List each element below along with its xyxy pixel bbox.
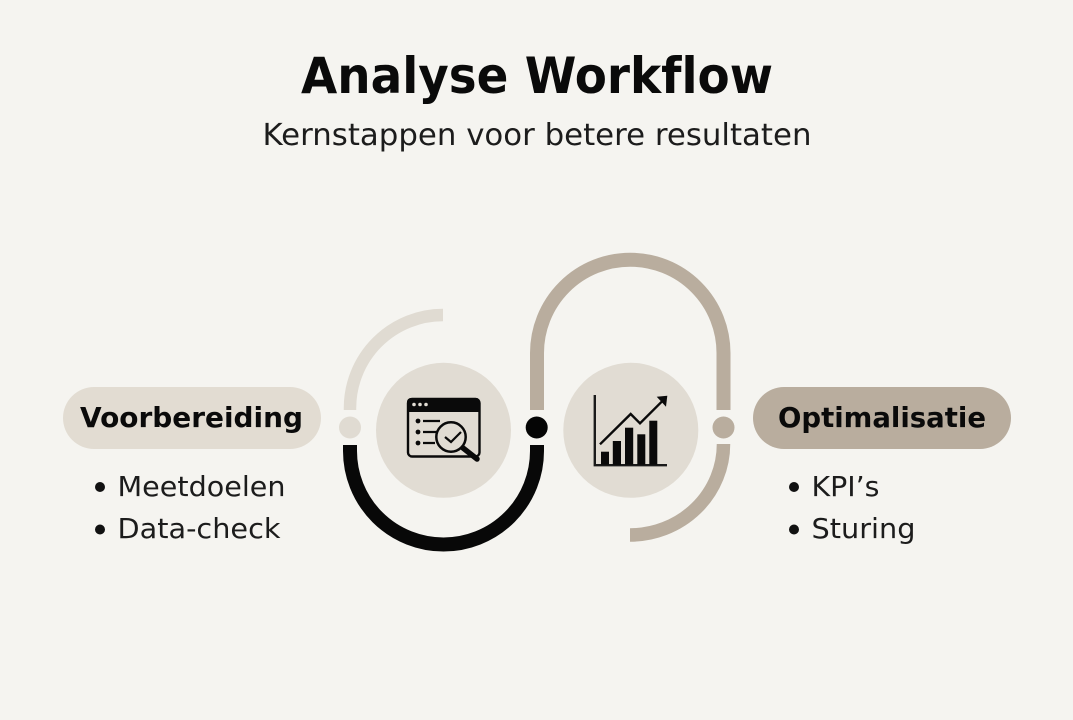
list: Optimalisatie: Sturing	[812, 512, 916, 545]
title: Analyse Workflow	[301, 47, 773, 105]
pill: Voorbereiding: Voorbereiding	[80, 401, 303, 434]
arc: black bottom	[350, 445, 537, 544]
arc: tan top	[537, 260, 724, 410]
subtitle: Kernstappen voor betere resultaten	[262, 118, 812, 153]
pill: Voorbereiding	[63, 387, 321, 449]
list: Voorbereiding	[95, 470, 286, 545]
list: Optimalisatie	[789, 470, 916, 545]
arc: tan bottom right	[630, 444, 724, 535]
icon: rising bar chart	[563, 363, 698, 498]
pill: Optimalisatie: Optimalisatie	[778, 401, 986, 434]
node: tan	[712, 416, 734, 438]
node: black	[526, 416, 548, 438]
list: Voorbereiding: Data-check	[118, 512, 281, 545]
list: Voorbereiding: Meetdoelen	[118, 470, 286, 503]
list: Optimalisatie: KPI’s	[812, 470, 880, 503]
arc: light top left	[350, 315, 443, 410]
icon: browser with magnifier	[376, 363, 511, 498]
node: light	[339, 416, 361, 438]
pill: Optimalisatie	[753, 387, 1011, 449]
